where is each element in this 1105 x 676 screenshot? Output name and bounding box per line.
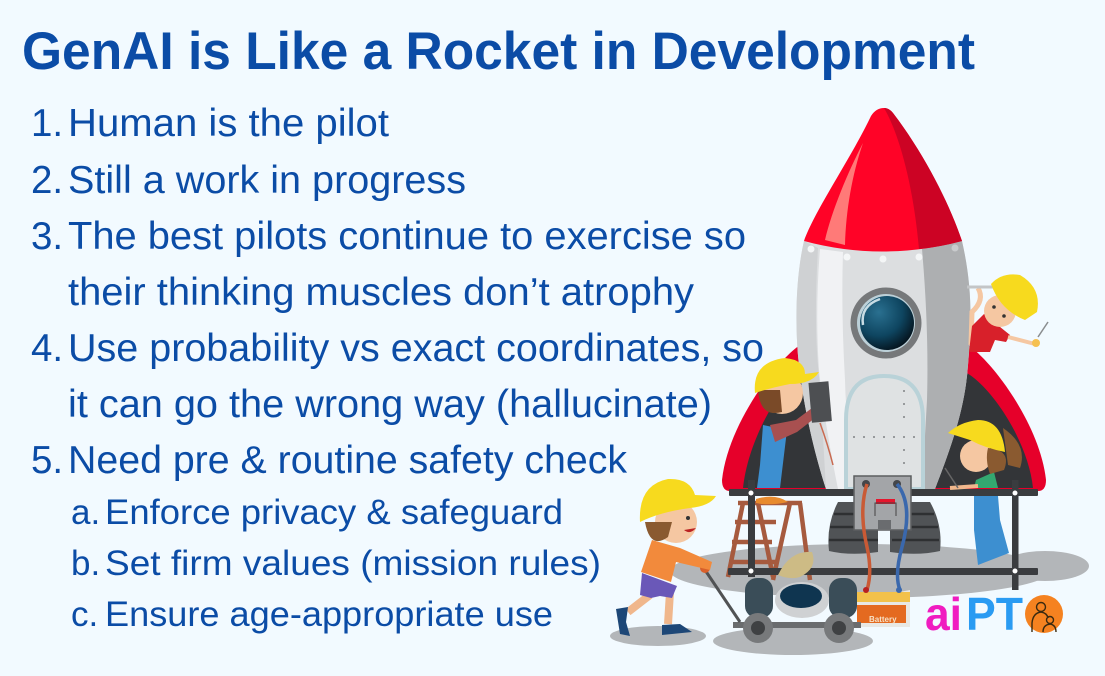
item 3: their thinking muscles don’t atrophy (68, 271, 695, 314)
body side shade (796, 241, 826, 489)
cables (863, 484, 870, 590)
right fin (930, 345, 1046, 491)
sub-item c: Ensure age-appropriate use (105, 595, 553, 634)
porthole (850, 288, 922, 358)
battery: Battery (869, 615, 897, 624)
logo: aiPT: ai (925, 588, 962, 640)
item 2: 2. (31, 159, 63, 202)
control box (854, 476, 911, 530)
worker: electrician (755, 358, 833, 488)
left fin (722, 345, 840, 491)
worker: boy on rocket (967, 274, 1048, 352)
sub-item a: a. (71, 493, 100, 532)
item 2: Still a work in progress (68, 159, 466, 202)
title: GenAI is Like a Rocket in Development (22, 22, 975, 81)
sub-item a: Enforce privacy & safeguard (105, 493, 563, 532)
sub-item b: b. (71, 544, 100, 583)
scaffold bars (728, 480, 1038, 590)
body highlight (817, 249, 858, 489)
item 3 (31, 215, 746, 314)
logo: aiPT: PT (966, 588, 1023, 640)
ladder (728, 503, 810, 580)
battery (857, 587, 910, 627)
worker: girl (945, 420, 1022, 565)
item 1: Human is the pilot (68, 102, 389, 145)
item 4: 4. (31, 327, 63, 370)
item 1: 1. (31, 102, 63, 145)
scaffold (616, 274, 1048, 643)
fin interiors (743, 372, 830, 488)
body shade (922, 241, 970, 489)
item 5: Need pre & routine safety check (68, 439, 628, 482)
sub-item c: c. (71, 595, 98, 634)
item 4: Use probability vs exact coordinates, so (68, 327, 764, 370)
logo icon: people (1025, 595, 1063, 633)
lower boosters (828, 502, 878, 554)
item 4 (31, 327, 764, 426)
sub-item b: Set firm values (mission rules) (105, 544, 601, 583)
rivets (808, 244, 958, 262)
item 4: it can go the wrong way (hallucinate) (68, 383, 712, 426)
logo: aiPT (925, 588, 1063, 640)
robot cart (733, 552, 861, 643)
worker: boy with cart (616, 479, 740, 636)
rocket (722, 108, 1046, 554)
body (796, 241, 970, 489)
nose cone (804, 108, 962, 252)
item 3: 3. (31, 215, 63, 258)
item 3: The best pilots continue to exercise so (68, 215, 746, 258)
illustration: rocket with workers (610, 108, 1089, 655)
item 5: 5. (31, 439, 63, 482)
numbered list (31, 102, 764, 634)
ground shadows (610, 544, 1089, 655)
hatch door (846, 376, 923, 489)
